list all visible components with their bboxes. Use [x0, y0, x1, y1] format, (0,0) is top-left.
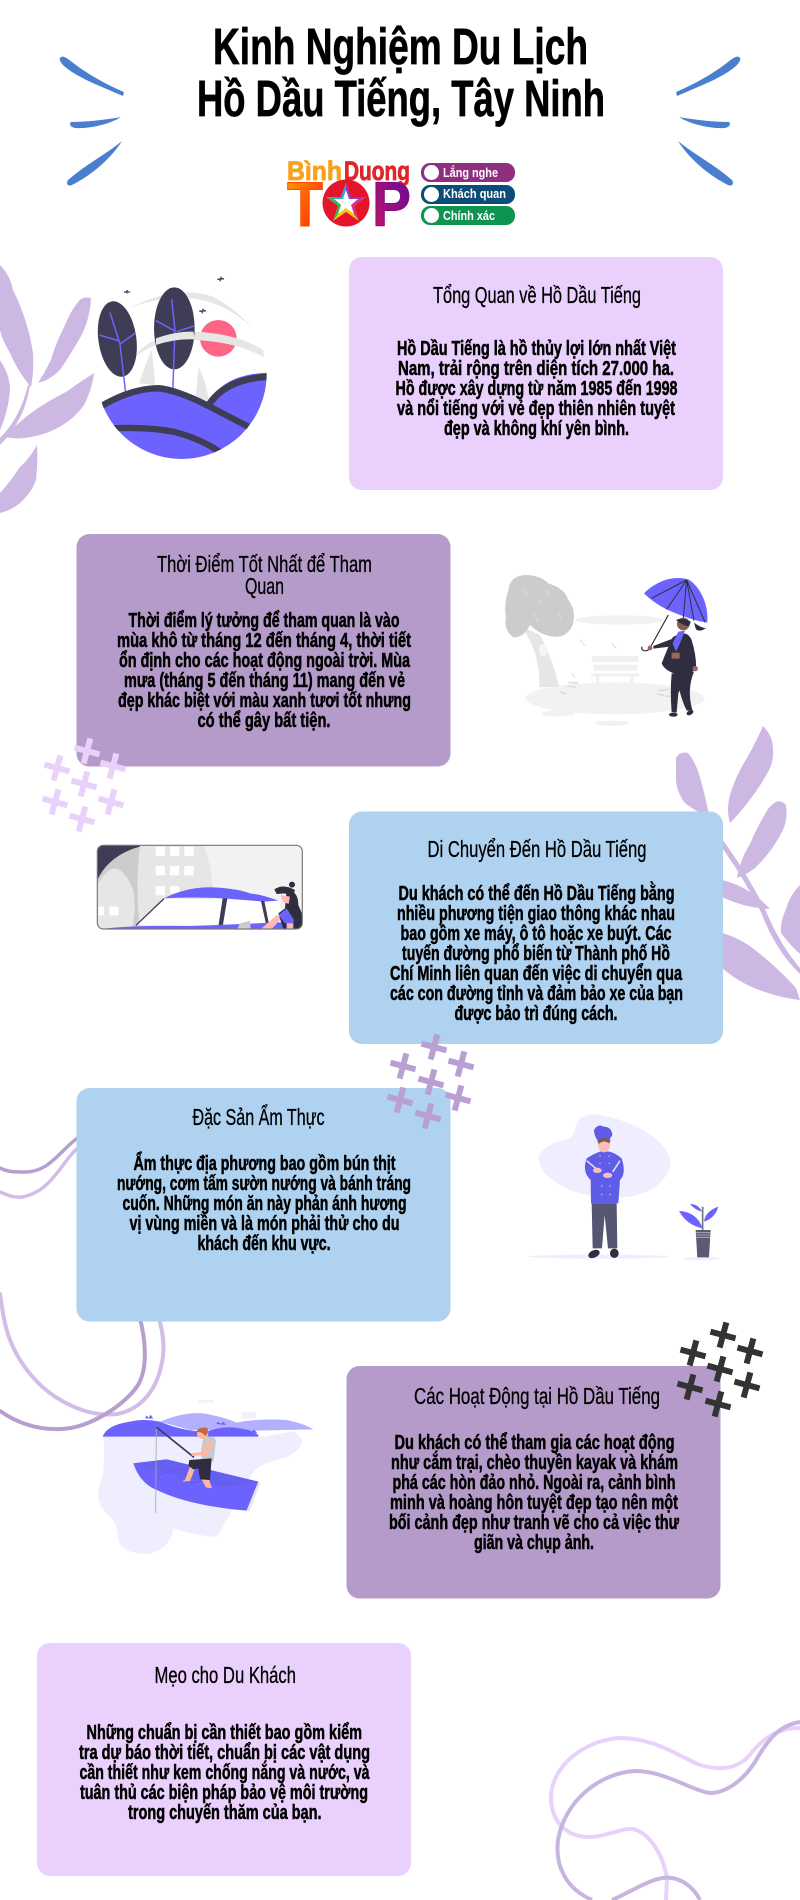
- body text: [117, 1152, 411, 1255]
- body text: giãn và chụp ảnh.: [474, 1532, 594, 1554]
- card background: [349, 257, 723, 490]
- body text: có thể gây bất tiện.: [198, 710, 330, 732]
- body text: cuốn. Những món ăn này phản ánh hương: [122, 1193, 406, 1215]
- body text: [117, 610, 411, 732]
- panel: tips for travelers: [37, 1643, 411, 1876]
- heading: Mẹo cho Du Khách: [154, 1662, 296, 1688]
- body text: các con đường tỉnh và đảm bảo xe của bạn: [390, 983, 683, 1005]
- panel: activities: [346, 1366, 720, 1598]
- body text: Nam, trải rộng trên diện tích 27.000 ha.: [398, 358, 674, 380]
- body text: mưa (tháng 5 đến tháng 11) mang đến vẻ: [124, 670, 405, 692]
- decoration: plant right: [676, 726, 800, 1000]
- logo: Khách quan: [443, 186, 506, 201]
- body text: được bảo trì đúng cách.: [454, 1003, 618, 1025]
- illustration: chef and plant: [528, 1114, 720, 1260]
- body text: bối cảnh đẹp như tranh vẽ cho cả việc thư: [389, 1512, 679, 1534]
- decoration: blue strokes left: [60, 57, 124, 186]
- logo: Duong: [344, 156, 410, 186]
- illustration: man fishing in boat: [98, 1400, 313, 1554]
- body text: minh và hoàng hôn tuyệt đẹp tạo nên một: [390, 1492, 678, 1514]
- body text: Hồ được xây dựng từ năm 1985 đến 1998: [396, 378, 678, 400]
- illustration: woman and car: [97, 845, 303, 929]
- heading: Tổng Quan về Hồ Dầu Tiếng: [433, 282, 641, 308]
- title: [197, 18, 605, 127]
- decoration: dark crosses: [674, 1319, 766, 1420]
- body text: trong chuyến thăm của bạn.: [128, 1802, 322, 1824]
- decoration: light purple crosses: [39, 735, 129, 835]
- decoration: squiggle upper left: [0, 1136, 80, 1197]
- card background: [37, 1643, 411, 1876]
- logo: [287, 156, 515, 240]
- body text: vị vùng miền và là món phải thử cho du: [130, 1213, 400, 1235]
- body text: Hồ Dầu Tiếng là hồ thủy lợi lớn nhất Việt: [397, 338, 676, 360]
- body text: khách đến khu vực.: [198, 1233, 330, 1255]
- heading: Quan: [245, 573, 284, 599]
- logo: Bình: [287, 156, 342, 186]
- body text: bao gồm xe máy, ô tô hoặc xe buýt. Các: [400, 923, 672, 945]
- body text: Chí Minh liên quan đến việc di chuyển qua: [390, 963, 683, 985]
- body text: [389, 1432, 679, 1554]
- panel: best time to visit: [76, 534, 450, 766]
- body text: và nổi tiếng với vẻ đẹp thiên nhiên tuyệt: [397, 398, 675, 420]
- logo: Chính xác: [443, 208, 495, 223]
- body text: tuyến đường phổ biến từ Thành phố Hồ: [402, 943, 670, 965]
- body text: cần thiết như kem chống nắng và nước, và: [80, 1760, 370, 1784]
- illustration: woman with umbrella in park: [505, 575, 707, 726]
- card background: [346, 1366, 720, 1598]
- heading: Đặc Sản Ẩm Thực: [192, 1103, 324, 1130]
- logo: Lắng nghe: [443, 165, 498, 180]
- panel: getting to the lake: [349, 812, 723, 1044]
- body text: [390, 881, 683, 1025]
- title: Kinh Nghiệm Du Lịch: [213, 18, 588, 75]
- decoration: blue strokes right: [676, 57, 740, 186]
- heading: [157, 551, 372, 599]
- decoration: squiggle lower left: [0, 1294, 164, 1429]
- title: Hồ Dầu Tiếng, Tây Ninh: [197, 70, 605, 127]
- body text: Du khách có thể tham gia các hoạt động: [394, 1432, 674, 1454]
- decoration: plant left: [0, 265, 94, 513]
- card background: [76, 534, 450, 766]
- body text: ổn định cho các hoạt động ngoài trời. Mùa: [119, 650, 411, 672]
- card background: [349, 812, 723, 1044]
- body text: phá các hòn đảo nhỏ. Ngoài ra, cảnh bình: [392, 1472, 676, 1494]
- body text: đẹp và không khí yên bình.: [444, 418, 629, 440]
- body text: nhiều phương tiện giao thông khác nhau: [397, 903, 675, 925]
- logo: T: [287, 170, 323, 240]
- heading: Các Hoạt Động tại Hồ Dầu Tiếng: [414, 1383, 660, 1409]
- body text: như cắm trại, chèo thuyền kayak và khám: [391, 1450, 678, 1474]
- body text: Ẩm thực địa phương bao gồm bún thịt: [134, 1152, 396, 1175]
- body text: Những chuẩn bị cần thiết bao gồm kiểm: [86, 1722, 362, 1744]
- body text: Thời điểm lý tưởng để tham quan là vào: [128, 610, 400, 632]
- panel: overview: [349, 257, 723, 490]
- card background: [76, 1088, 450, 1322]
- body text: tra dự báo thời tiết, chuẩn bị các vật dụng: [79, 1742, 370, 1764]
- illustration: hills and trees: [93, 277, 270, 470]
- body text: mùa khô từ tháng 12 đến tháng 4, thời tiết: [117, 630, 411, 652]
- body text: đẹp khác biệt với màu xanh tươi tốt nhưng: [118, 690, 411, 712]
- panel: local cuisine: [76, 1088, 450, 1322]
- decoration: squiggle bottom right: [551, 1722, 800, 1900]
- heading: Di Chuyển Đến Hồ Dầu Tiếng: [428, 836, 646, 862]
- body text: [396, 338, 678, 440]
- body text: Du khách có thể đến Hồ Dầu Tiếng bằng: [398, 881, 674, 905]
- body text: nướng, cơm tấm sườn nướng và bánh tráng: [117, 1173, 411, 1195]
- heading: Thời Điểm Tốt Nhất để Tham: [157, 551, 372, 577]
- decoration: purple crosses: [384, 1031, 477, 1132]
- body text: tuân thủ các biện pháp bảo vệ môi trường: [80, 1782, 368, 1804]
- logo: P: [372, 170, 411, 240]
- body text: [79, 1722, 370, 1824]
